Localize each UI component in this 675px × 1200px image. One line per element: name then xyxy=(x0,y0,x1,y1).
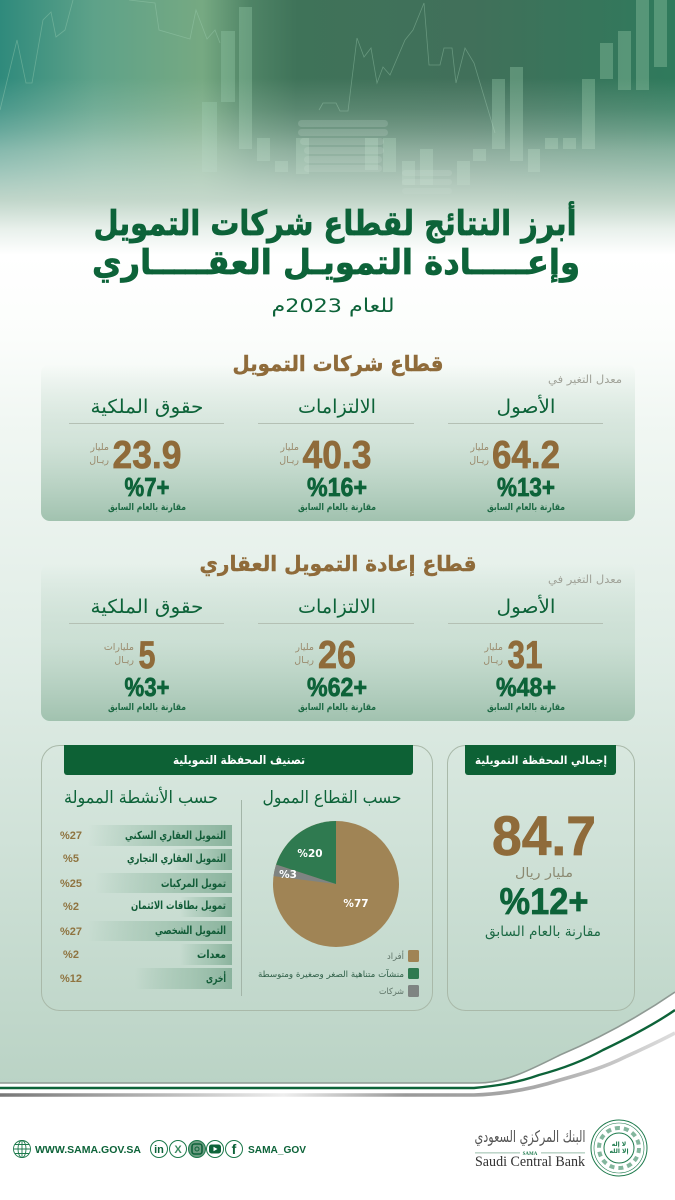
metric: assets: %13+ xyxy=(497,472,555,502)
curved footer ribbon xyxy=(0,992,675,1095)
section heading: قطاع شركات التمويل xyxy=(232,352,444,376)
metric: assets: الأصول xyxy=(496,595,556,618)
pie legend: أفراد xyxy=(387,950,404,962)
logo: arabic name: البنك المركزي السعودي xyxy=(474,1127,586,1147)
bar list: financed activities: التمويل العقاري التجاري xyxy=(127,852,226,865)
hero banner with financial chart xyxy=(0,0,675,260)
bar list: financed activities: تمويل المركبات xyxy=(161,877,226,890)
metric: equity xyxy=(69,396,224,513)
metric: liabilities xyxy=(258,596,414,713)
metric: liabilities: الالتزامات xyxy=(298,596,376,618)
icon: x xyxy=(170,1140,186,1158)
social handle: SAMA_GOV xyxy=(248,1144,306,1156)
header tab: تصنيف المحفظة التمويلية xyxy=(173,753,305,768)
metric: assets xyxy=(448,595,603,713)
metric: assets: 31 xyxy=(508,634,542,677)
section heading: قطاع إعادة التمويل العقاري xyxy=(200,552,476,577)
logo: SAMA: SAMA xyxy=(523,1152,538,1157)
footer contact bar xyxy=(14,1140,306,1158)
icon: youtube xyxy=(206,1140,224,1158)
metric: assets: %48+ xyxy=(496,672,556,702)
icon: linkedin xyxy=(150,1140,168,1158)
logo: english name: Saudi Central Bank xyxy=(475,1154,585,1170)
comparison note: مقارنة بالعام السابق xyxy=(485,924,601,940)
change percentage: %12+ xyxy=(500,881,588,922)
metric: equity: ريـال xyxy=(89,455,109,466)
subheading: by financed activities: حسب الأنشطة الممولة xyxy=(64,787,218,808)
header tab xyxy=(64,745,413,775)
metric: liabilities: 26 xyxy=(318,634,356,677)
pie chart: %3 xyxy=(279,869,297,881)
metric: assets: ريـال xyxy=(483,655,503,666)
logo: seal xyxy=(591,1120,647,1176)
metric: equity: حقوق الملكية xyxy=(90,396,204,418)
line chart xyxy=(0,0,495,133)
metric: assets xyxy=(448,395,603,513)
website: WWW.SAMA.GOV.SA xyxy=(35,1144,141,1156)
logo: seal: إلا الله xyxy=(609,1148,629,1155)
metric: liabilities: 40.3 xyxy=(302,434,372,477)
metric: equity: مقارنة بالعام السابق xyxy=(108,502,186,513)
pale green page body with curved bottom edge xyxy=(0,255,675,1083)
metric: liabilities xyxy=(258,396,414,513)
metric: equity xyxy=(69,596,224,713)
metric: liabilities: مقارنة بالعام السابق xyxy=(298,702,376,713)
icon: linkedin: in xyxy=(154,1144,164,1156)
panel: finance companies sector xyxy=(41,352,635,521)
panel: portfolio classification xyxy=(42,745,432,1010)
card background xyxy=(41,364,635,521)
panel outline xyxy=(448,746,634,1010)
metric: equity: مليار xyxy=(89,442,109,453)
icon: facebook xyxy=(226,1140,242,1158)
candlestick chart xyxy=(202,0,667,185)
bar list: financed activities xyxy=(60,825,232,989)
bar list: financed activities: %5 xyxy=(63,853,79,865)
rate of change note: معدل التغير في xyxy=(548,373,622,386)
metric: liabilities: مليار xyxy=(294,642,314,653)
metric: assets: ريـال xyxy=(469,455,489,466)
metric: assets: مقارنة بالعام السابق xyxy=(487,502,565,513)
metric: assets: مقارنة بالعام السابق xyxy=(487,702,565,713)
metric: equity: %7+ xyxy=(124,472,170,502)
rate of change note: معدل التغير في xyxy=(548,573,622,586)
bar list: financed activities: تمويل بطاقات الائتمان xyxy=(131,899,226,912)
metric: equity: مقارنة بالعام السابق xyxy=(108,702,186,713)
metric: assets: الأصول xyxy=(496,395,556,418)
pie chart: %77 xyxy=(343,898,369,910)
pie legend: منشآت متناهية الصغر وصغيرة ومتوسطة xyxy=(258,968,404,980)
unit: مليار ريال xyxy=(515,866,573,881)
metric: assets: مليار xyxy=(483,642,503,653)
bar list: financed activities: التمويل الشخصي xyxy=(155,924,226,937)
logo: seal: لا إله xyxy=(612,1141,626,1148)
metric: liabilities: مليار xyxy=(279,442,299,453)
pie chart: %20 xyxy=(297,848,323,860)
pie legend xyxy=(258,950,419,997)
metric: equity: ريـال xyxy=(114,655,134,666)
metric: equity: مليارات xyxy=(104,642,134,653)
title xyxy=(92,201,580,283)
Saudi Central Bank logo xyxy=(474,1120,647,1176)
bar list: financed activities: أخرى xyxy=(206,971,226,985)
metric: assets: 64.2 xyxy=(492,434,560,477)
bar list: financed activities: التمويل العقاري السكني xyxy=(125,829,226,842)
icon: x: X xyxy=(174,1144,182,1156)
icon: coin stack xyxy=(298,120,452,194)
icon: facebook: f xyxy=(232,1141,237,1157)
bar list: financed activities: %27 xyxy=(60,926,82,938)
title: أبرز النتائج لقطاع شركات التمويل xyxy=(94,201,576,244)
metric: liabilities: ريـال xyxy=(279,455,299,466)
panel: total financing portfolio xyxy=(448,745,634,1010)
metric: liabilities: ريـال xyxy=(294,655,314,666)
panel outline xyxy=(42,746,432,1010)
metric: liabilities: مقارنة بالعام السابق xyxy=(298,502,376,513)
card background xyxy=(41,564,635,721)
metric: liabilities: الالتزامات xyxy=(298,396,376,418)
subtitle: للعام 2023م xyxy=(272,295,394,317)
bar list: financed activities: %2 xyxy=(63,901,79,913)
subheading: by financed sector: حسب القطاع الممول xyxy=(262,788,402,808)
icon: instagram xyxy=(188,1140,206,1158)
bar list: financed activities: %25 xyxy=(60,878,82,890)
panel: real estate refinance sector xyxy=(41,552,635,721)
bar list: financed activities: %2 xyxy=(63,949,79,961)
bar list: financed activities: %12 xyxy=(60,973,82,985)
header tab xyxy=(465,745,616,775)
metric: liabilities: %16+ xyxy=(307,472,367,502)
pie legend: شركات xyxy=(379,987,404,997)
icon: globe xyxy=(14,1140,30,1158)
metric: equity: 5 xyxy=(138,634,156,677)
metric: assets: مليار xyxy=(469,442,489,453)
bar list: financed activities: %27 xyxy=(60,830,82,842)
total value: 84.7 xyxy=(492,804,596,867)
bar list: financed activities: معدات xyxy=(197,948,226,961)
pie chart xyxy=(273,821,399,947)
header tab: إجمالي المحفظة التمويلية xyxy=(475,753,607,768)
metric: equity: 23.9 xyxy=(112,434,182,477)
metric: liabilities: %62+ xyxy=(307,672,367,702)
metric: equity: %3+ xyxy=(124,672,170,702)
title: وإعـــــادة التمويـل العقـــــاري xyxy=(92,243,580,283)
metric: equity: حقوق الملكية xyxy=(90,596,204,618)
